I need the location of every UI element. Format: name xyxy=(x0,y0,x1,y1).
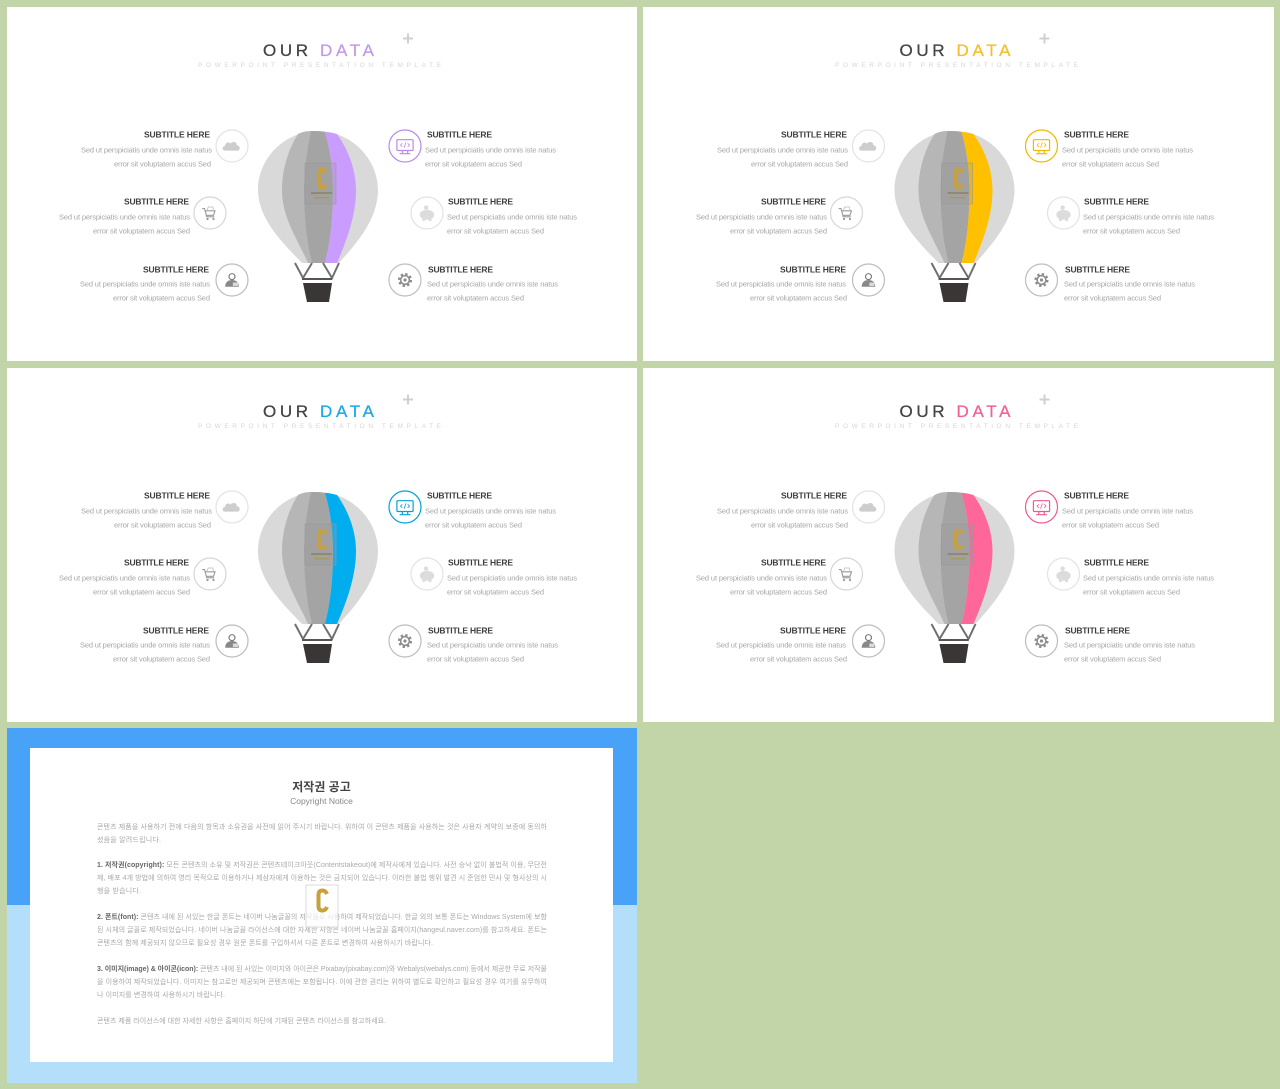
title xyxy=(263,41,375,60)
item: cart: Sed ut perspiciatis unde omnis iste natus xyxy=(696,212,827,222)
item: cloud: error sit voluptatem accus Sed xyxy=(751,160,848,168)
subtitle: POWERPOINT PRESENTATION TEMPLATE xyxy=(198,62,442,69)
item: person: SUBTITLE HERE xyxy=(780,264,846,274)
plus mark xyxy=(403,34,413,44)
notice: font xyxy=(97,912,548,947)
notice: copyright xyxy=(97,860,547,895)
item: cart: error sit voluptatem accus Sed xyxy=(730,588,827,596)
item: gear: error sit voluptatem accus Sed xyxy=(427,654,524,664)
item: cart: error sit voluptatem accus Sed xyxy=(730,226,827,236)
item: gear: error sit voluptatem accus Sed xyxy=(1064,294,1161,302)
balloon xyxy=(894,492,1014,663)
item: person: Sed ut perspiciatis unde omnis iste natus xyxy=(80,280,210,288)
item: person: Sed ut perspiciatis unde omnis iste natus xyxy=(80,640,210,650)
item: gear: Sed ut perspiciatis unde omnis iste natus xyxy=(427,640,558,650)
item: piggy bank xyxy=(411,196,577,236)
item: cloud: Sed ut perspiciatis unde omnis iste natus xyxy=(717,146,848,154)
heading: 저작권 공고 xyxy=(292,779,351,794)
item: gear xyxy=(389,264,558,302)
item: cloud xyxy=(717,129,884,168)
title xyxy=(900,41,1011,60)
item: gear xyxy=(1026,625,1195,664)
item: person: error sit voluptatem accus Sed xyxy=(113,654,210,664)
plus mark xyxy=(1040,394,1050,404)
item: person: SUBTITLE HERE xyxy=(143,625,209,635)
panel: purple slide xyxy=(7,7,637,361)
notice: license: 콘텐츠 제품 라이선스에 대한 자세한 사항은 홈페이지 하단에 기재된 콘텐츠 라이선스를 참고하세요. xyxy=(97,1016,386,1025)
item: gear xyxy=(389,625,558,664)
item: gear: SUBTITLE HERE xyxy=(428,264,493,274)
item: piggy bank xyxy=(1048,196,1214,236)
title: OUR xyxy=(263,402,308,421)
item: gear: SUBTITLE HERE xyxy=(428,625,493,635)
item: monitor xyxy=(1026,129,1193,168)
item: monitor xyxy=(1026,490,1193,530)
item: person: Sed ut perspiciatis unde omnis iste natus xyxy=(716,640,846,650)
item: monitor: error sit voluptatem accus Sed xyxy=(1062,160,1159,168)
item: cloud: error sit voluptatem accus Sed xyxy=(114,520,211,530)
notice: copyright: 1. 저작권(copyright): 모든 콘텐츠의 소유 및 저작권은 콘텐츠테이크아웃(Contentstakeout)에 제작사에게 있습니다. 사전 승낙 없이 불법적 이용, 무단전 xyxy=(97,860,547,869)
title: OUR xyxy=(263,41,308,60)
item: cloud: SUBTITLE HERE xyxy=(144,129,210,139)
notice: intro: 셨음을 알려드립니다. xyxy=(97,835,161,844)
item: monitor: Sed ut perspiciatis unde omnis iste natus xyxy=(1062,146,1193,154)
item: gear: error sit voluptatem accus Sed xyxy=(1064,654,1161,664)
item: person xyxy=(716,264,884,302)
subtitle: POWERPOINT PRESENTATION TEMPLATE xyxy=(198,423,442,430)
item: cart xyxy=(696,196,862,236)
item: person xyxy=(716,625,884,664)
item: piggy bank: error sit voluptatem accus Sed xyxy=(447,226,544,236)
item: piggy bank: Sed ut perspiciatis unde omnis iste natus xyxy=(1083,574,1214,582)
item: monitor: SUBTITLE HERE xyxy=(1064,490,1129,500)
title xyxy=(900,402,1011,421)
item: cloud: error sit voluptatem accus Sed xyxy=(751,520,848,530)
panel: yellow slide xyxy=(643,7,1274,361)
item: piggy bank: SUBTITLE HERE xyxy=(448,196,513,206)
notice: intro xyxy=(97,822,548,844)
item: monitor xyxy=(389,129,556,168)
item: monitor: Sed ut perspiciatis unde omnis iste natus xyxy=(425,506,556,516)
item: piggy bank xyxy=(411,557,577,596)
balloon xyxy=(258,492,378,663)
notice: font: 콘텐츠의 함께 제공되지 않으므로 필요성 경우 원문 폰트를 구입하셔서 다른 폰트로 변경하여 사용하시기 바랍니다. xyxy=(97,938,433,947)
notice: image and icon: 을 이용하여 제작되었습니다. 이미지는 참고로만 제공되며 콘텐츠에는 포함됩니다. 이에 관한 권리는 위하여 별도로 확인하고 필요성 경우 여기를 유무하여 xyxy=(97,977,547,986)
notice: intro: 콘텐츠 제품을 사용하기 전에 다음의 항목과 소유권을 사전에 읽어 주시기 바랍니다. 위하여 이 콘텐츠 제품을 사용하는 것은 사용자 계약의 보증에 동의하 xyxy=(97,822,548,831)
item: cart xyxy=(59,196,226,236)
notice: copyright: 제, 배포 4개 방법에 의하여 영리 목적으로 이용하거나 제삼자에게 이용하는 것은 금지되어 있습니다. 이러한 불법 행위 발견 시 준엄한 민사 및 형사상의 시 xyxy=(97,873,547,882)
item: cloud xyxy=(717,490,884,530)
item: person xyxy=(80,264,248,302)
subheading: Copyright Notice xyxy=(290,796,353,806)
item: monitor xyxy=(389,490,556,530)
item: person: Sed ut perspiciatis unde omnis iste natus xyxy=(716,280,846,288)
plus mark xyxy=(1040,34,1050,44)
item: piggy bank xyxy=(1048,557,1214,596)
item: cloud xyxy=(81,129,248,168)
title: DATA xyxy=(956,41,1011,60)
subtitle: POWERPOINT PRESENTATION TEMPLATE xyxy=(835,423,1079,430)
balloon xyxy=(894,131,1014,302)
title: DATA xyxy=(956,402,1011,421)
item: cloud: error sit voluptatem accus Sed xyxy=(114,160,211,168)
item: cart: error sit voluptatem accus Sed xyxy=(93,588,190,596)
panel: copyright notice xyxy=(7,728,637,1083)
item: cart: Sed ut perspiciatis unde omnis iste natus xyxy=(696,574,827,582)
item: person: error sit voluptatem accus Sed xyxy=(113,294,210,302)
balloon xyxy=(258,131,378,302)
item: cloud: Sed ut perspiciatis unde omnis iste natus xyxy=(81,146,212,154)
item: gear: SUBTITLE HERE xyxy=(1065,264,1130,274)
notice: image and icon xyxy=(97,964,548,999)
item: monitor: error sit voluptatem accus Sed xyxy=(425,160,522,168)
item: cloud: Sed ut perspiciatis unde omnis iste natus xyxy=(717,506,848,516)
item: piggy bank: error sit voluptatem accus Sed xyxy=(1083,226,1180,236)
logo watermark xyxy=(306,885,338,927)
plus mark xyxy=(403,394,413,404)
item: piggy bank: SUBTITLE HERE xyxy=(448,557,513,567)
item: piggy bank: error sit voluptatem accus Sed xyxy=(1083,588,1180,596)
item: gear: Sed ut perspiciatis unde omnis iste natus xyxy=(1064,280,1195,288)
item: cart: Sed ut perspiciatis unde omnis iste natus xyxy=(59,574,190,582)
item: monitor: SUBTITLE HERE xyxy=(1064,129,1129,139)
panel: blue slide xyxy=(7,368,637,722)
item: person: SUBTITLE HERE xyxy=(143,264,209,274)
notice: font: 된 시체의 글꼴로 제작되었습니다. 네이버 나눔글꼴 라이선스에 대한 자세한 사항은 네이버 나눔글꼴 홈페이지(hangeul.naver.com)를 참고하세요. 폰트는 xyxy=(97,925,548,934)
item: monitor: error sit voluptatem accus Sed xyxy=(1062,520,1159,530)
title: OUR xyxy=(900,402,944,421)
item: monitor: Sed ut perspiciatis unde omnis iste natus xyxy=(1062,506,1193,516)
item: piggy bank: error sit voluptatem accus Sed xyxy=(447,588,544,596)
item: person: SUBTITLE HERE xyxy=(780,625,846,635)
item: monitor: SUBTITLE HERE xyxy=(427,129,492,139)
item: person xyxy=(80,625,248,664)
item: gear xyxy=(1026,264,1195,302)
title xyxy=(263,402,375,421)
item: cart xyxy=(59,557,226,596)
item: gear: SUBTITLE HERE xyxy=(1065,625,1130,635)
title: DATA xyxy=(320,41,375,60)
item: monitor: Sed ut perspiciatis unde omnis iste natus xyxy=(425,146,556,154)
item: gear: Sed ut perspiciatis unde omnis iste natus xyxy=(427,280,558,288)
item: gear: Sed ut perspiciatis unde omnis iste natus xyxy=(1064,640,1195,650)
notice: copyright: 행을 받습니다. xyxy=(97,886,141,895)
item: gear: error sit voluptatem accus Sed xyxy=(427,294,524,302)
notice: image and icon: 나 이미지를 변경하여 사용하시기 바랍니다. xyxy=(97,990,225,999)
item: cart: SUBTITLE HERE xyxy=(124,196,189,206)
item: monitor: error sit voluptatem accus Sed xyxy=(425,520,522,530)
item: cart xyxy=(696,557,862,596)
item: piggy bank: Sed ut perspiciatis unde omnis iste natus xyxy=(447,574,577,582)
item: cloud: SUBTITLE HERE xyxy=(144,490,210,500)
item: person: error sit voluptatem accus Sed xyxy=(750,294,847,302)
item: cart: error sit voluptatem accus Sed xyxy=(93,226,190,236)
item: piggy bank: Sed ut perspiciatis unde omnis iste natus xyxy=(1083,212,1214,222)
item: person: error sit voluptatem accus Sed xyxy=(750,654,847,664)
item: monitor: SUBTITLE HERE xyxy=(427,490,492,500)
item: cloud: Sed ut perspiciatis unde omnis iste natus xyxy=(81,506,212,516)
item: piggy bank: SUBTITLE HERE xyxy=(1084,557,1149,567)
item: cloud: SUBTITLE HERE xyxy=(781,490,847,500)
panel: pink slide xyxy=(643,368,1274,722)
item: piggy bank: Sed ut perspiciatis unde omnis iste natus xyxy=(447,212,577,222)
subtitle: POWERPOINT PRESENTATION TEMPLATE xyxy=(835,62,1079,69)
item: cart: SUBTITLE HERE xyxy=(761,557,826,567)
item: cloud: SUBTITLE HERE xyxy=(781,129,847,139)
title: DATA xyxy=(320,402,375,421)
item: cart: SUBTITLE HERE xyxy=(124,557,189,567)
item: cart: SUBTITLE HERE xyxy=(761,196,826,206)
item: piggy bank: SUBTITLE HERE xyxy=(1084,196,1149,206)
notice: image and icon: 3. 이미지(image) & 아이콘(icon): 콘텐츠 내에 된 사있는 이미지와 아이콘은 Pixabay(pixabay.com)와 Webalys(webalys.com) 등에서 제공한 무료 저작물 xyxy=(97,964,548,973)
item: cart: Sed ut perspiciatis unde omnis iste natus xyxy=(59,212,190,222)
title: OUR xyxy=(900,41,944,60)
notice: font: 2. 폰트(font): 콘텐츠 내에 된 서있는 한글 폰트는 네이버 나눔글꼴의 저작물로 사용하여 제작되었습니다. 한글 외의 보통 폰트는 Windows System에 보함 xyxy=(97,912,548,921)
item: cloud xyxy=(81,490,248,530)
